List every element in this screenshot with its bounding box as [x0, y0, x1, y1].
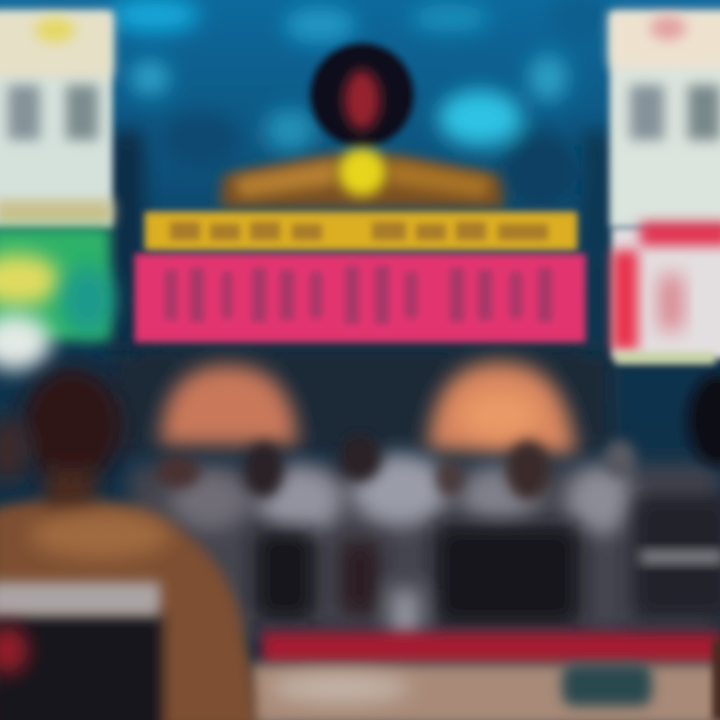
right screen: [610, 12, 720, 364]
red carpet: [262, 632, 720, 664]
orange domes: [160, 362, 576, 455]
teal clouds: [110, 0, 610, 210]
pink marquee banner: [135, 254, 585, 342]
foreground chair: [0, 582, 162, 720]
crowd: [130, 434, 720, 640]
dark circular emblem: [310, 43, 414, 147]
left foreground person: [0, 367, 256, 720]
beige floor: [250, 664, 720, 720]
teal floor object: [562, 664, 652, 706]
right foreground person: [632, 374, 720, 720]
left screen: [0, 12, 114, 370]
yellow marquee banner: [145, 212, 577, 250]
golden arch with yellow centre: [220, 148, 505, 208]
